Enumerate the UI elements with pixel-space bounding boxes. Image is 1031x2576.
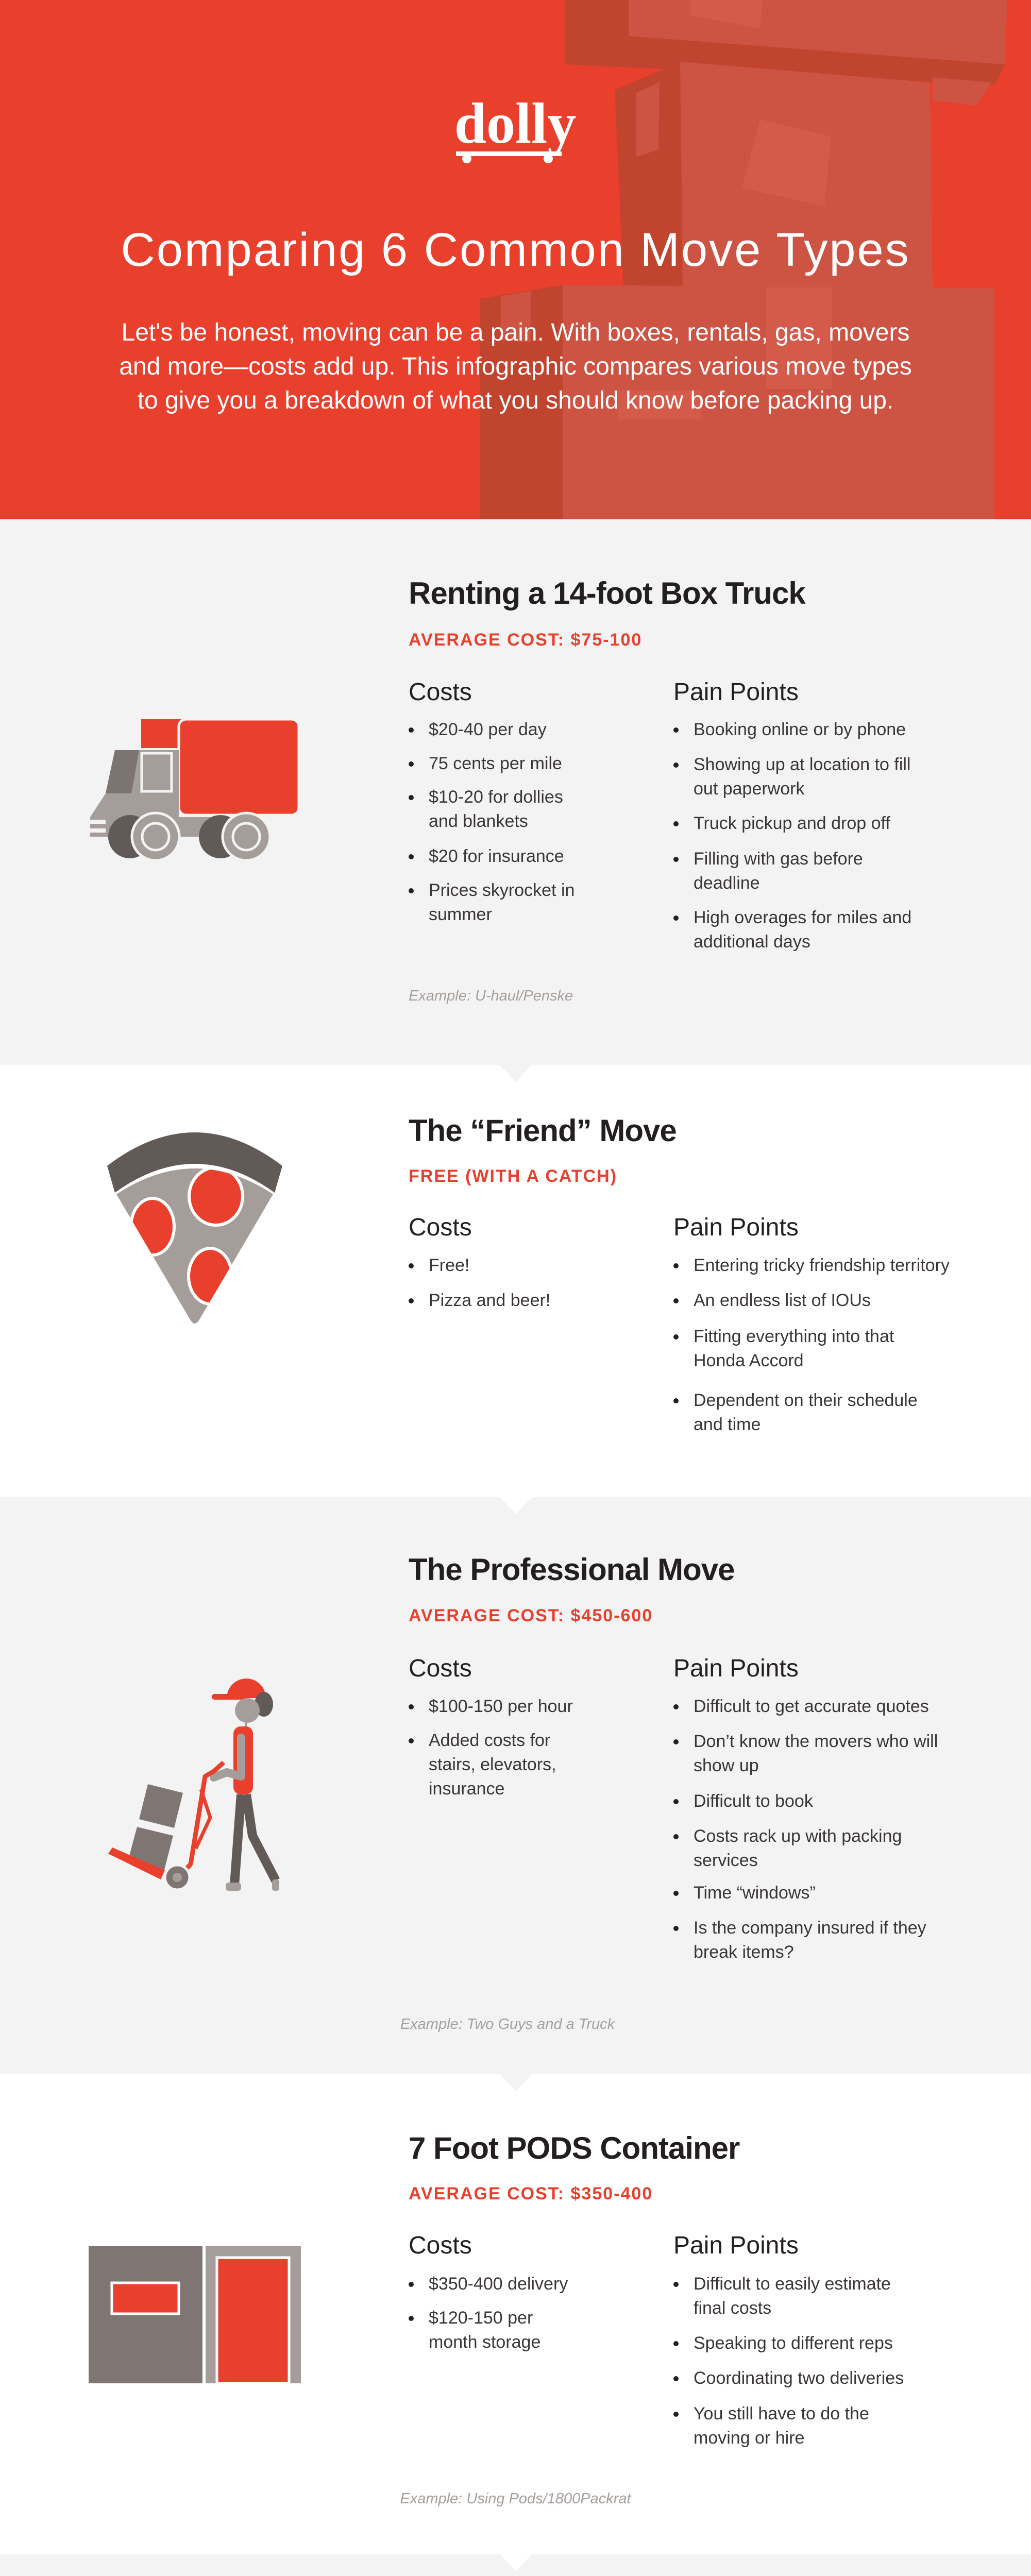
pain points list: and time (694, 1415, 760, 1434)
panel: craigslist (0, 2554, 1031, 2576)
pain points list: An endless list of IOUs (694, 1291, 871, 1310)
pain points list: Difficult to easily estimate (694, 2274, 891, 2294)
pain points list: Honda Accord (694, 1351, 804, 1370)
pain points list (673, 1214, 950, 1434)
pain points list: Is the company insured if they (694, 1918, 926, 1938)
pain points list: Pain Points (673, 2232, 799, 2259)
costs list: $350-400 delivery (429, 2274, 568, 2294)
icon: pizza slice (107, 1132, 282, 1324)
pain points list: Booking online or by phone (694, 720, 906, 739)
example note: Example: U-haul/Penske (409, 988, 573, 1004)
pain points list: You still have to do the (694, 2404, 869, 2424)
costs list (409, 2232, 568, 2352)
intro text: and more—costs add up. This infographic compares various move types (119, 353, 912, 380)
costs list: $120-150 per (429, 2308, 533, 2328)
average cost: AVERAGE COST: $350-400 (409, 2184, 653, 2204)
pain points list: Don’t know the movers who will (694, 1732, 938, 1751)
pain points list: Pain Points (673, 1655, 799, 1682)
pain points list: Pain Points (673, 1214, 799, 1241)
costs list (409, 679, 574, 924)
heading: PODS: 7 Foot PODS Container (409, 2131, 739, 2165)
cost label: FREE (WITH A CATCH) (409, 1166, 617, 1186)
intro text: to give you a breakdown of what you should know before packing up. (138, 387, 893, 414)
icon: container (89, 2246, 301, 2383)
panel: professional move (0, 1497, 1031, 2074)
illustration: stacked boxes (480, 0, 1007, 519)
pain points list: Fitting everything into that (694, 1327, 894, 1346)
pain points list: additional days (694, 932, 810, 952)
costs list: $10-20 for dollies (429, 787, 563, 807)
pain points list: Costs rack up with packing (694, 1826, 902, 1846)
costs list: month storage (429, 2332, 540, 2352)
pain points list: Difficult to book (694, 1791, 813, 1811)
costs list: $100-150 per hour (429, 1697, 573, 1716)
pain points list (673, 1655, 938, 1962)
pain points list: Coordinating two deliveries (694, 2368, 904, 2388)
pain points list: services (694, 1851, 758, 1870)
costs list: summer (429, 905, 492, 924)
costs list: Free! (429, 1256, 469, 1275)
pain points list: Time “windows” (694, 1883, 816, 1903)
costs list: stairs, elevators, (429, 1755, 556, 1774)
pain points list: moving or hire (694, 2428, 804, 2448)
pain points list: High overages for miles and (694, 908, 911, 927)
heading: renting a box truck: Renting a 14-foot Box Truck (409, 576, 805, 611)
heading: friend move: The “Friend” Move (409, 1113, 677, 1148)
average cost: AVERAGE COST: $75-100 (409, 630, 642, 650)
pain points list: Filling with gas before (694, 849, 863, 869)
pain points list: final costs (694, 2298, 771, 2318)
average cost: AVERAGE COST: $450-600 (409, 1606, 653, 1625)
pain points list: Difficult to get accurate quotes (694, 1697, 929, 1716)
example note: Example: Using Pods/1800Packrat (400, 2490, 631, 2507)
header panel (0, 0, 1031, 519)
panel: friend move (107, 1118, 950, 1430)
pain points list: Showing up at location to fill (694, 755, 910, 774)
heading: professional move: The Professional Move (409, 1552, 735, 1587)
intro text: Let's be honest, moving can be a pain. With boxes, rentals, gas, movers (122, 319, 909, 346)
costs list: $20 for insurance (429, 846, 564, 866)
icon: truck (90, 719, 298, 859)
intro text (119, 319, 912, 414)
pain points list (673, 2232, 904, 2448)
costs list: Costs (409, 1655, 472, 1682)
pain points list: break items? (694, 1942, 794, 1962)
pain points list: Dependent on their schedule (694, 1391, 918, 1410)
costs list (409, 1214, 550, 1310)
costs list: Costs (409, 679, 472, 706)
costs list: Added costs for (429, 1731, 550, 1750)
example note: Example: Two Guys and a Truck (400, 2016, 615, 2032)
pain points list: Speaking to different reps (694, 2333, 893, 2353)
pain points list: Truck pickup and drop off (694, 814, 890, 833)
costs list: insurance (429, 1779, 504, 1799)
pain points list (673, 679, 911, 952)
costs list: and blankets (429, 811, 528, 831)
costs list: Pizza and beer! (429, 1291, 550, 1310)
costs list: 75 cents per mile (429, 754, 562, 773)
pain points list: show up (694, 1756, 759, 1775)
pain points list: out paperwork (694, 779, 804, 799)
costs list (409, 1655, 573, 1799)
logo: dolly: dolly (454, 92, 576, 156)
costs list: $20-40 per day (429, 720, 547, 739)
panel: box truck (0, 519, 1031, 1065)
pain points list: Pain Points (673, 679, 799, 706)
costs list: Prices skyrocket in (429, 880, 574, 900)
panel: PODS container (0, 2074, 1031, 2554)
pain points list: deadline (694, 873, 760, 893)
pain points list: Entering tricky friendship territory (694, 1256, 950, 1275)
icon: mover with hand truck (108, 1679, 280, 1891)
costs list: Costs (409, 1214, 472, 1241)
title: Comparing 6 Common Move Types (121, 224, 910, 276)
costs list: Costs (409, 2232, 472, 2259)
